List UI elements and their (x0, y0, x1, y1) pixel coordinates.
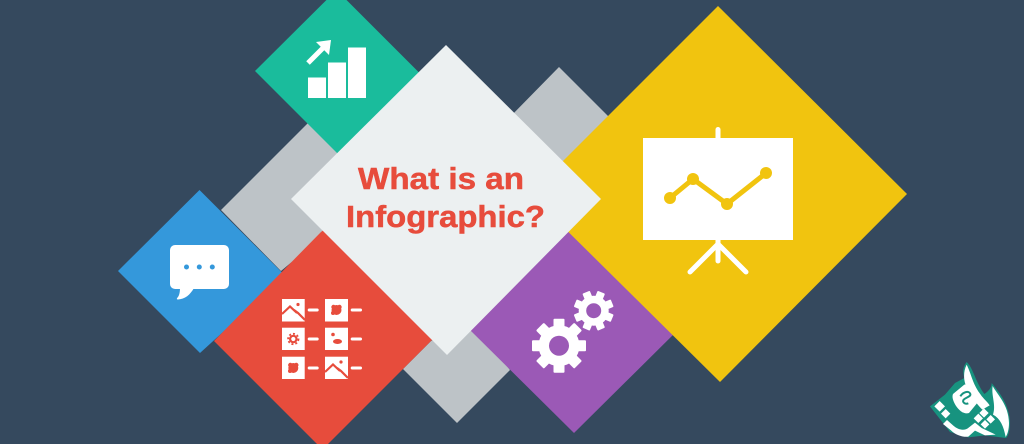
title: Infographic? (346, 199, 545, 234)
icon: speech bubble (170, 245, 229, 300)
icon: presentation board (643, 130, 793, 272)
panel: gray diamond bottom (403, 320, 510, 423)
panel: purple diamond (470, 224, 682, 433)
title (346, 161, 545, 234)
panel: green diamond (255, 0, 425, 156)
icon: gears (532, 291, 614, 373)
small gear (574, 291, 614, 331)
title: What is an (358, 161, 524, 196)
large gear (532, 319, 586, 373)
icon: image and text list (282, 299, 362, 379)
panel: yellow diamond (530, 6, 907, 382)
panel: blue diamond (118, 190, 285, 353)
icon: calligraphic logo (930, 362, 1010, 438)
panel: red diamond (214, 225, 440, 444)
icon: rising bar chart (308, 40, 366, 98)
panel: central diamond (291, 45, 601, 355)
panel: gray diamond right (505, 67, 620, 178)
panel: gray diamond upper left (221, 111, 345, 271)
